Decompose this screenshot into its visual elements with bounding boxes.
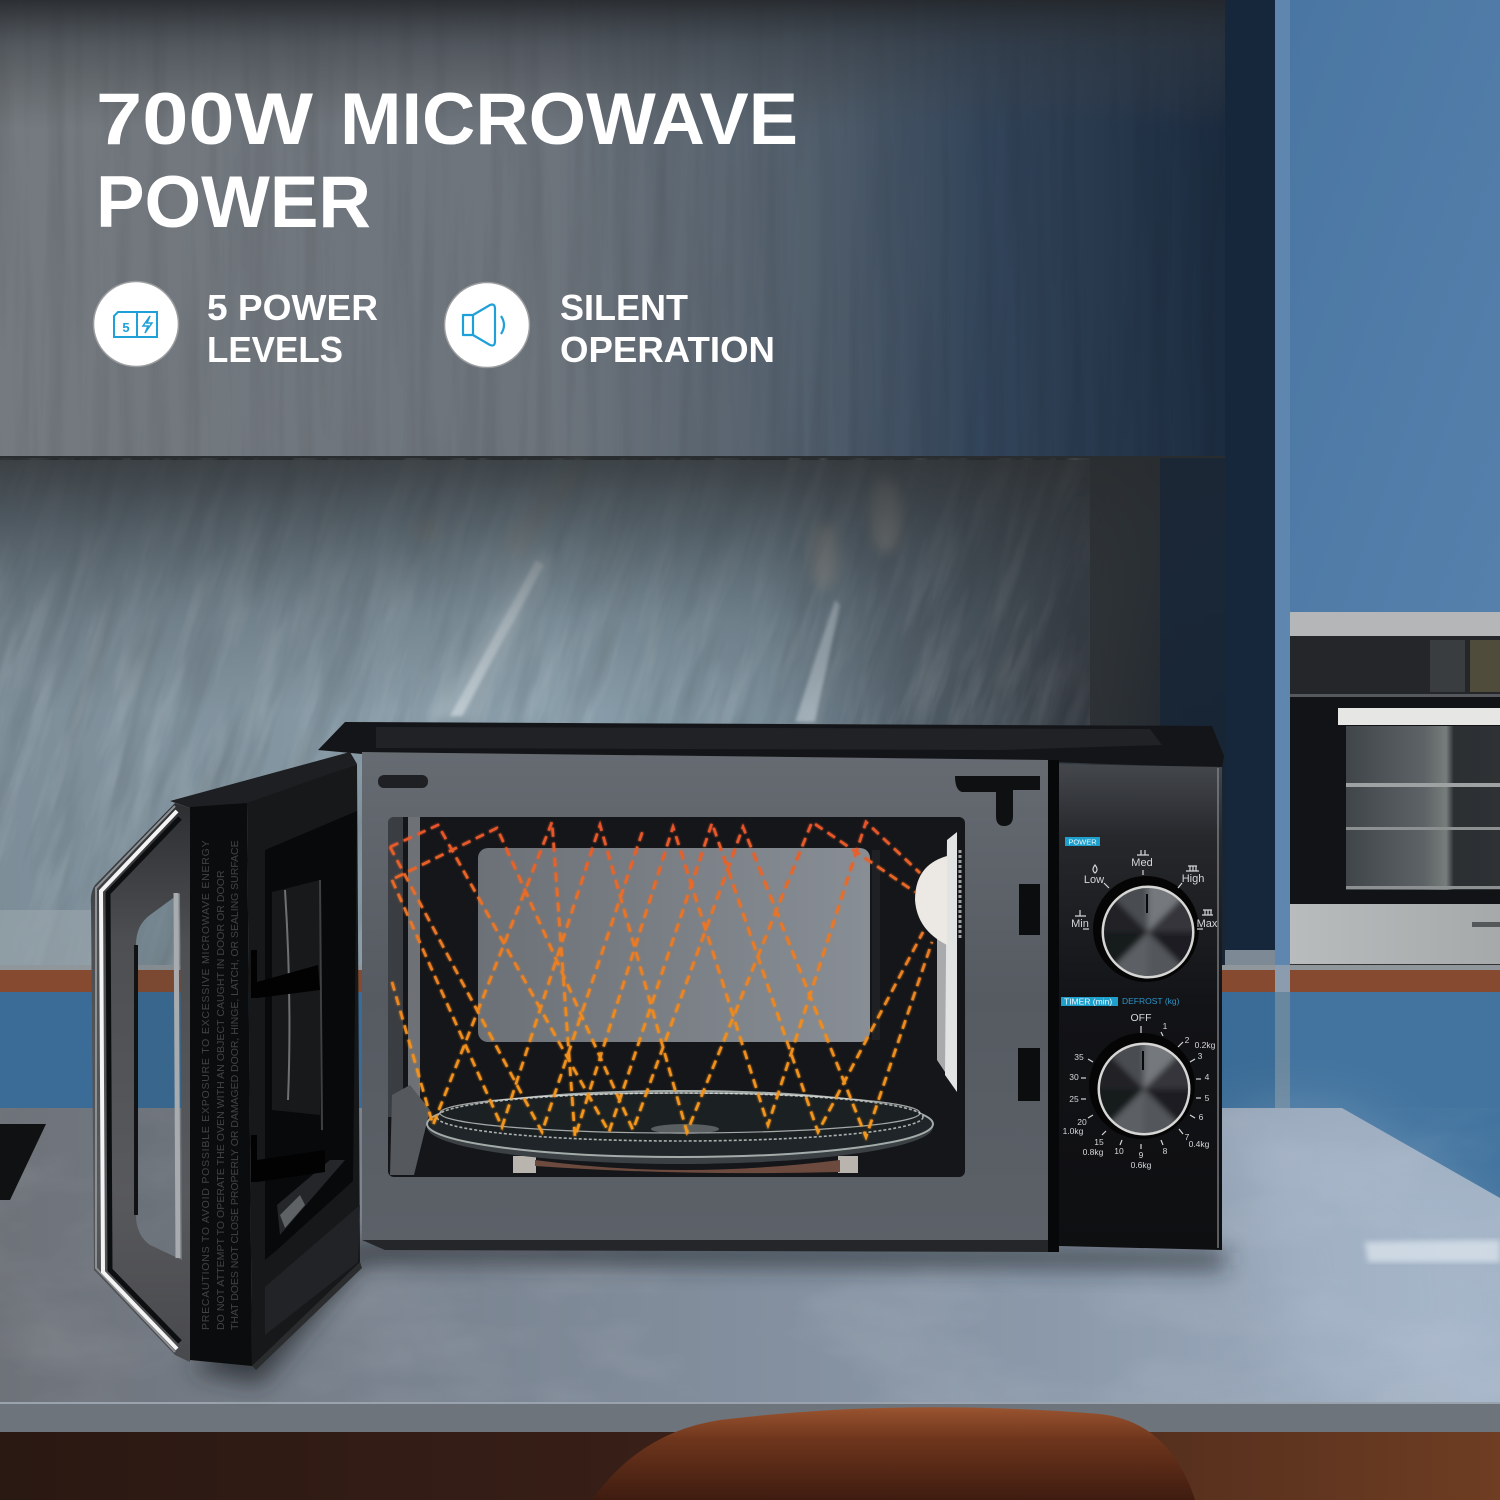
power labels: Med [1131, 857, 1153, 869]
icon: power levels [94, 282, 178, 366]
title: POWER [96, 162, 371, 243]
timer scale: 5 [1205, 1093, 1210, 1103]
power labels: Max [1197, 918, 1218, 930]
panel edge [1048, 760, 1059, 1252]
timer header: DEFROST (kg) [1122, 996, 1180, 1006]
glass turntable [427, 1090, 933, 1164]
door warning text: DO NOT ATTEMPT TO OPERATE THE OVEN WITH AN OBJECT CAUGHT IN DOOR OR DOOR [215, 870, 227, 1330]
door top edge [170, 752, 357, 808]
wood base [0, 1432, 1500, 1500]
stone countertop [0, 1108, 1500, 1433]
cavity bright reflection [915, 856, 947, 945]
tall dark column and right blue cabinet [1225, 0, 1500, 970]
microwave top [318, 722, 1224, 768]
door inner lower band [265, 1205, 360, 1335]
door latches [251, 950, 325, 1182]
timer scale: 8 [1163, 1146, 1168, 1156]
hinge slot [378, 775, 428, 788]
label [207, 287, 378, 370]
cavity left wall [388, 817, 430, 1175]
oven cavity [388, 817, 965, 1177]
timer scale: 3 [1198, 1051, 1203, 1061]
panel right trim [1217, 768, 1219, 1248]
microwave shadow on counter [190, 1240, 1225, 1385]
lower cabinets and wood trim [0, 965, 1500, 1222]
front frame bottom lip [362, 1240, 1048, 1252]
door warning text: THAT DOES NOT CLOSE PROPERLY OR DAMAGED DOOR, HINGE, LATCH, OR SEALING SURFACE [229, 840, 241, 1330]
cavity right panel [872, 850, 880, 1040]
timer scale: 35 [1074, 1052, 1084, 1062]
title: 700W [96, 79, 313, 160]
timer header [1061, 996, 1180, 1006]
feature: silent operation [444, 282, 775, 370]
label: SILENT [560, 287, 688, 328]
feature: 5 power levels [94, 282, 378, 370]
icon: speaker [444, 282, 530, 368]
power labels: High [1182, 873, 1204, 885]
timer scale: 0.4kg [1189, 1139, 1210, 1149]
timer knob [1084, 1029, 1204, 1149]
title: MICROWAVE [340, 79, 798, 160]
chair back [592, 1407, 1195, 1500]
timer scale: 1.0kg [1063, 1126, 1084, 1136]
label: 5 POWER [207, 287, 378, 328]
microwave [91, 722, 1224, 1370]
timer scale: 20 [1077, 1117, 1087, 1127]
timer scale: 25 [1069, 1094, 1079, 1104]
timer scale: 9 [1139, 1150, 1144, 1160]
timer scale: 7 [1185, 1132, 1190, 1142]
panel face [1059, 764, 1222, 1250]
label: LEVELS [207, 329, 343, 370]
back wall glass [478, 848, 870, 1042]
timer ticks [1081, 1026, 1201, 1149]
control panel [1048, 760, 1222, 1252]
timer scale: 0.8kg [1083, 1147, 1104, 1157]
door bottom edge [252, 1262, 362, 1370]
timer scale: OFF [1130, 1012, 1152, 1024]
open door [91, 752, 362, 1370]
timer scale: 4 [1205, 1072, 1210, 1082]
marble veins [414, 462, 902, 722]
built-in oven [1290, 612, 1500, 964]
bracket rollers [513, 1156, 858, 1173]
power labels [1065, 837, 1218, 930]
body frame [362, 752, 1048, 1242]
power knob [1088, 872, 1208, 992]
handle chrome trim [96, 806, 180, 1352]
timer scale: 10 [1114, 1146, 1124, 1156]
icon: power levels: 5 [122, 320, 130, 335]
timer scale: 0.2kg [1195, 1040, 1216, 1050]
label [560, 287, 775, 370]
timer scale: 15 [1094, 1137, 1104, 1147]
title [96, 79, 798, 243]
door side strip [190, 803, 252, 1366]
marble backsplash [0, 458, 1225, 965]
timer scale: 6 [1199, 1112, 1204, 1122]
door inner panel [247, 764, 360, 1366]
timer scale [1063, 1012, 1216, 1170]
door warning text [200, 840, 241, 1330]
door recess [265, 811, 357, 1260]
power labels: POWER [1068, 838, 1097, 846]
timer scale: 0.6kg [1131, 1160, 1152, 1170]
power ticks and level icons [1075, 850, 1213, 929]
power labels: Low [1084, 874, 1104, 886]
microwave wave paths [390, 822, 932, 1137]
door handle frame [91, 803, 190, 1362]
right wall highlight [937, 939, 946, 1072]
latch slots [1018, 884, 1040, 1101]
handle cutout tint [136, 893, 182, 1260]
door latch plate [955, 776, 1040, 826]
serrated wall detail [958, 850, 962, 940]
timer header: TIMER (min) [1064, 996, 1112, 1006]
door warning text: PRECAUTIONS TO AVOID POSSIBLE EXPOSURE TO EXCESSIVE MICROWAVE ENERGY [200, 840, 212, 1330]
timer scale: 30 [1069, 1072, 1079, 1082]
power labels: Min [1071, 918, 1089, 930]
timer scale: 1 [1163, 1021, 1168, 1031]
top panel bevel [376, 727, 1162, 750]
upper cabinet [0, 0, 1225, 460]
timer scale: 2 [1185, 1035, 1190, 1045]
door mesh [272, 880, 345, 1235]
label: OPERATION [560, 329, 775, 370]
